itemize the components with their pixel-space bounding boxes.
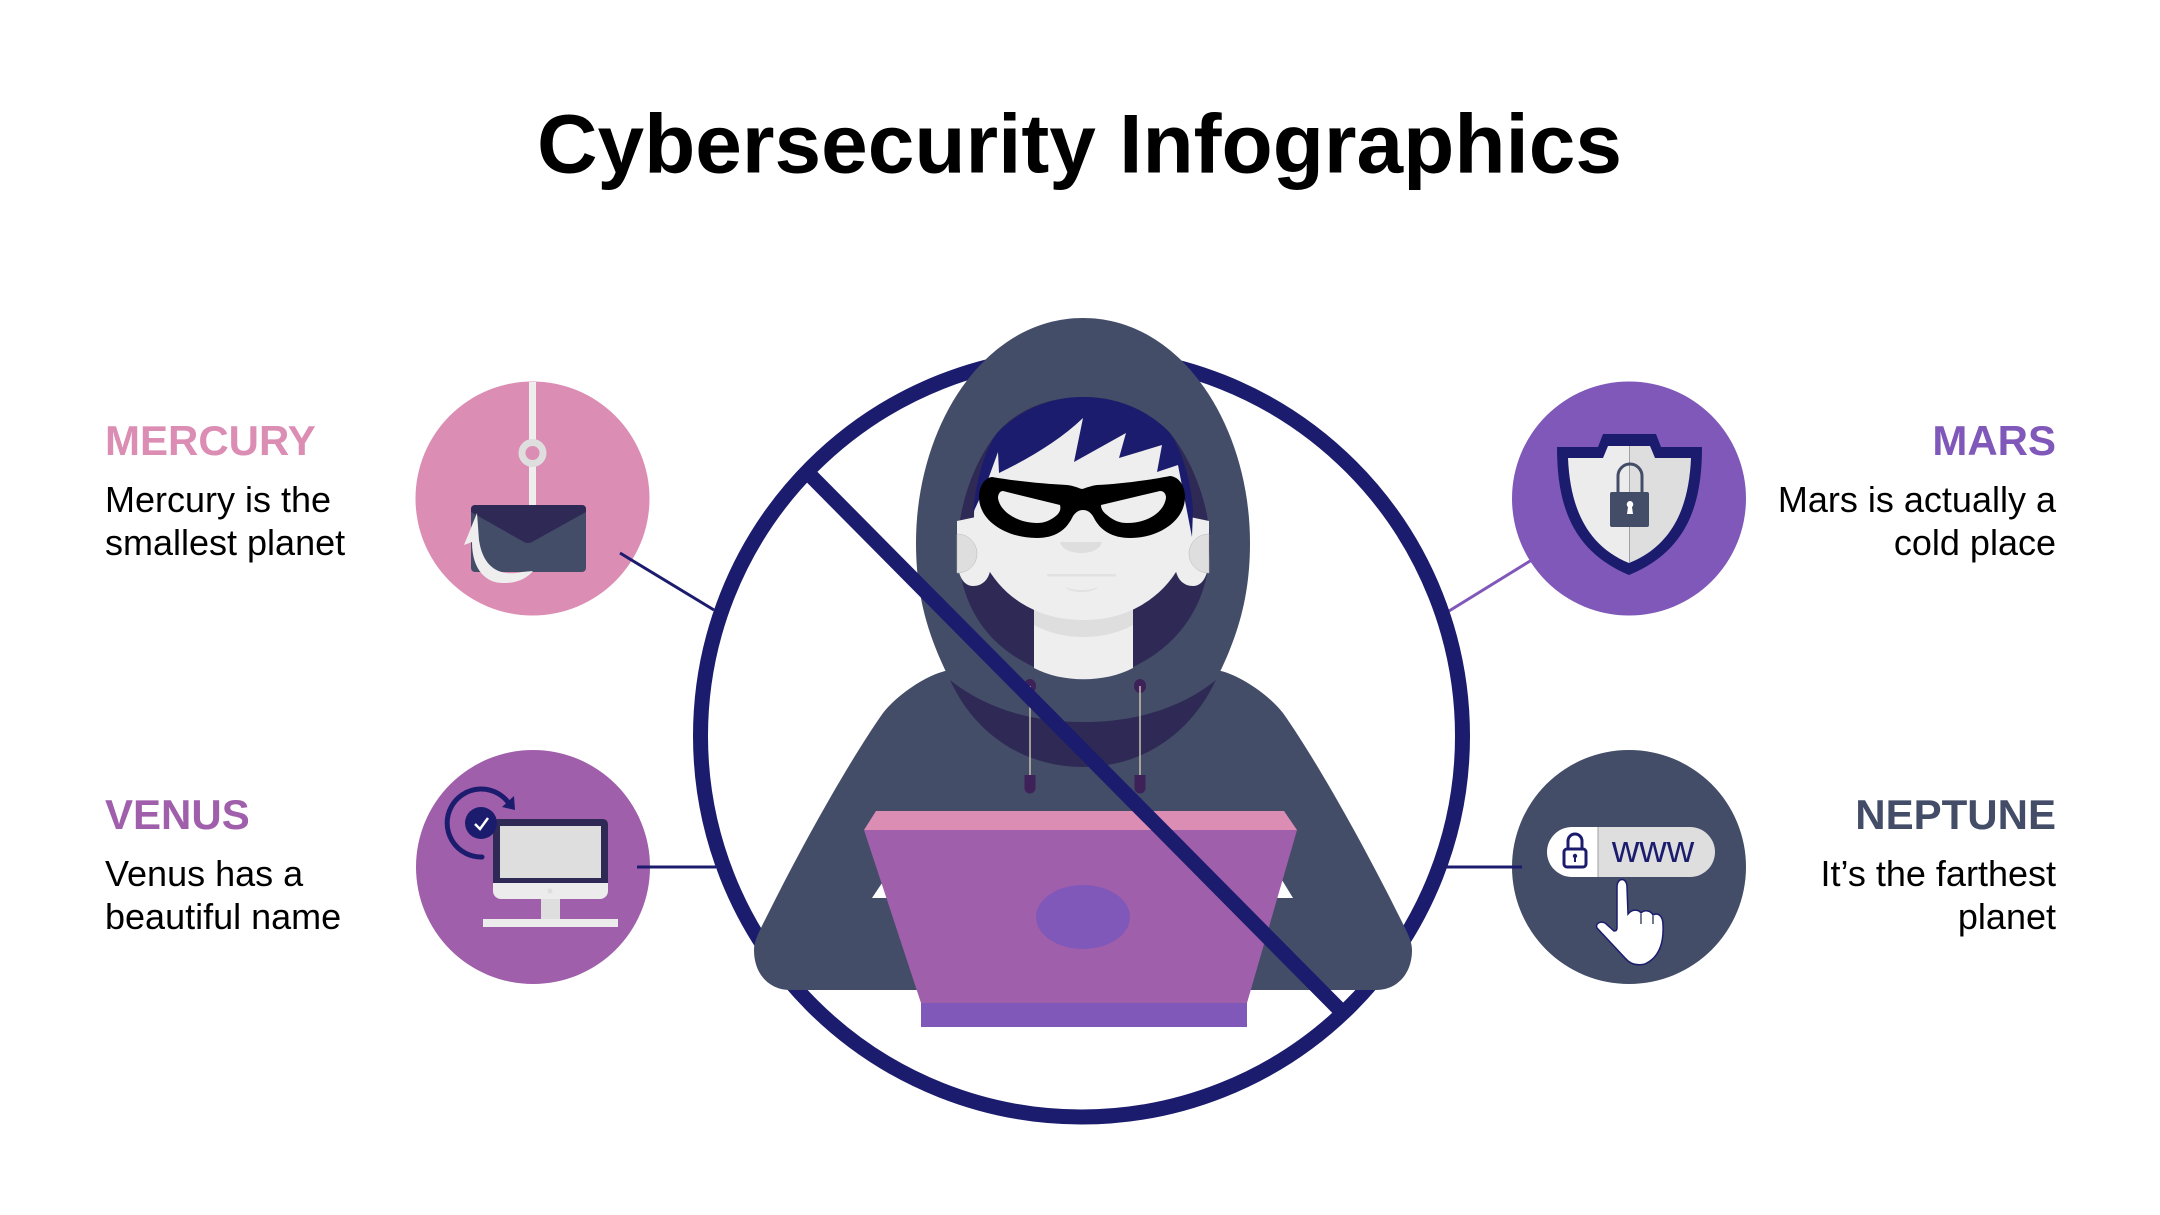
text: mercury description: smallest planet xyxy=(105,522,345,563)
text: mars description: Mars is actually a xyxy=(1778,479,2056,520)
ears xyxy=(957,517,1209,586)
hair xyxy=(973,397,1193,537)
glasses xyxy=(979,476,1185,538)
text: venus description: Venus has a xyxy=(105,853,303,894)
facial features xyxy=(1047,542,1116,592)
connector: neptune xyxy=(1446,866,1522,868)
icon: mercury phishing email xyxy=(416,382,650,616)
icon: mars shield lock xyxy=(1512,382,1746,616)
connector: mars xyxy=(1449,553,1543,611)
icon: neptune secure url: www xyxy=(1611,829,1695,871)
icon: neptune secure url xyxy=(1512,750,1746,984)
hoodie body xyxy=(754,671,1412,990)
hoodie strings xyxy=(1024,679,1146,794)
laptop xyxy=(864,811,1297,1027)
gap between arms xyxy=(872,880,1293,898)
panel: venus text xyxy=(105,791,341,937)
face xyxy=(974,410,1192,620)
prohibition slash xyxy=(810,475,1338,1008)
hood collar shadow xyxy=(950,680,1216,767)
heading: mars: MARS xyxy=(1932,417,2056,464)
hood xyxy=(916,318,1250,722)
ring: prohibition circle xyxy=(700,355,1462,1117)
text: venus description: beautiful name xyxy=(105,896,341,937)
text: neptune description: It’s the farthest xyxy=(1821,853,2056,894)
heading: neptune: NEPTUNE xyxy=(1855,791,2056,838)
panel: neptune text xyxy=(1821,791,2056,937)
hood opening xyxy=(958,397,1210,667)
text: mercury description: Mercury is the xyxy=(105,479,331,520)
title: Cybersecurity Infographics xyxy=(537,96,1622,190)
text: neptune description: planet xyxy=(1958,896,2056,937)
panel: mercury text xyxy=(105,417,345,563)
illustration: hacker xyxy=(754,318,1412,1027)
connector: mercury xyxy=(620,553,714,610)
heading: venus: VENUS xyxy=(105,791,250,838)
neck xyxy=(1034,600,1133,679)
panel: mars text xyxy=(1778,417,2057,563)
heading: mercury: MERCURY xyxy=(105,417,316,464)
icon: venus computer update xyxy=(416,750,650,984)
text: mars description: cold place xyxy=(1894,522,2056,563)
connector: venus xyxy=(637,866,716,868)
